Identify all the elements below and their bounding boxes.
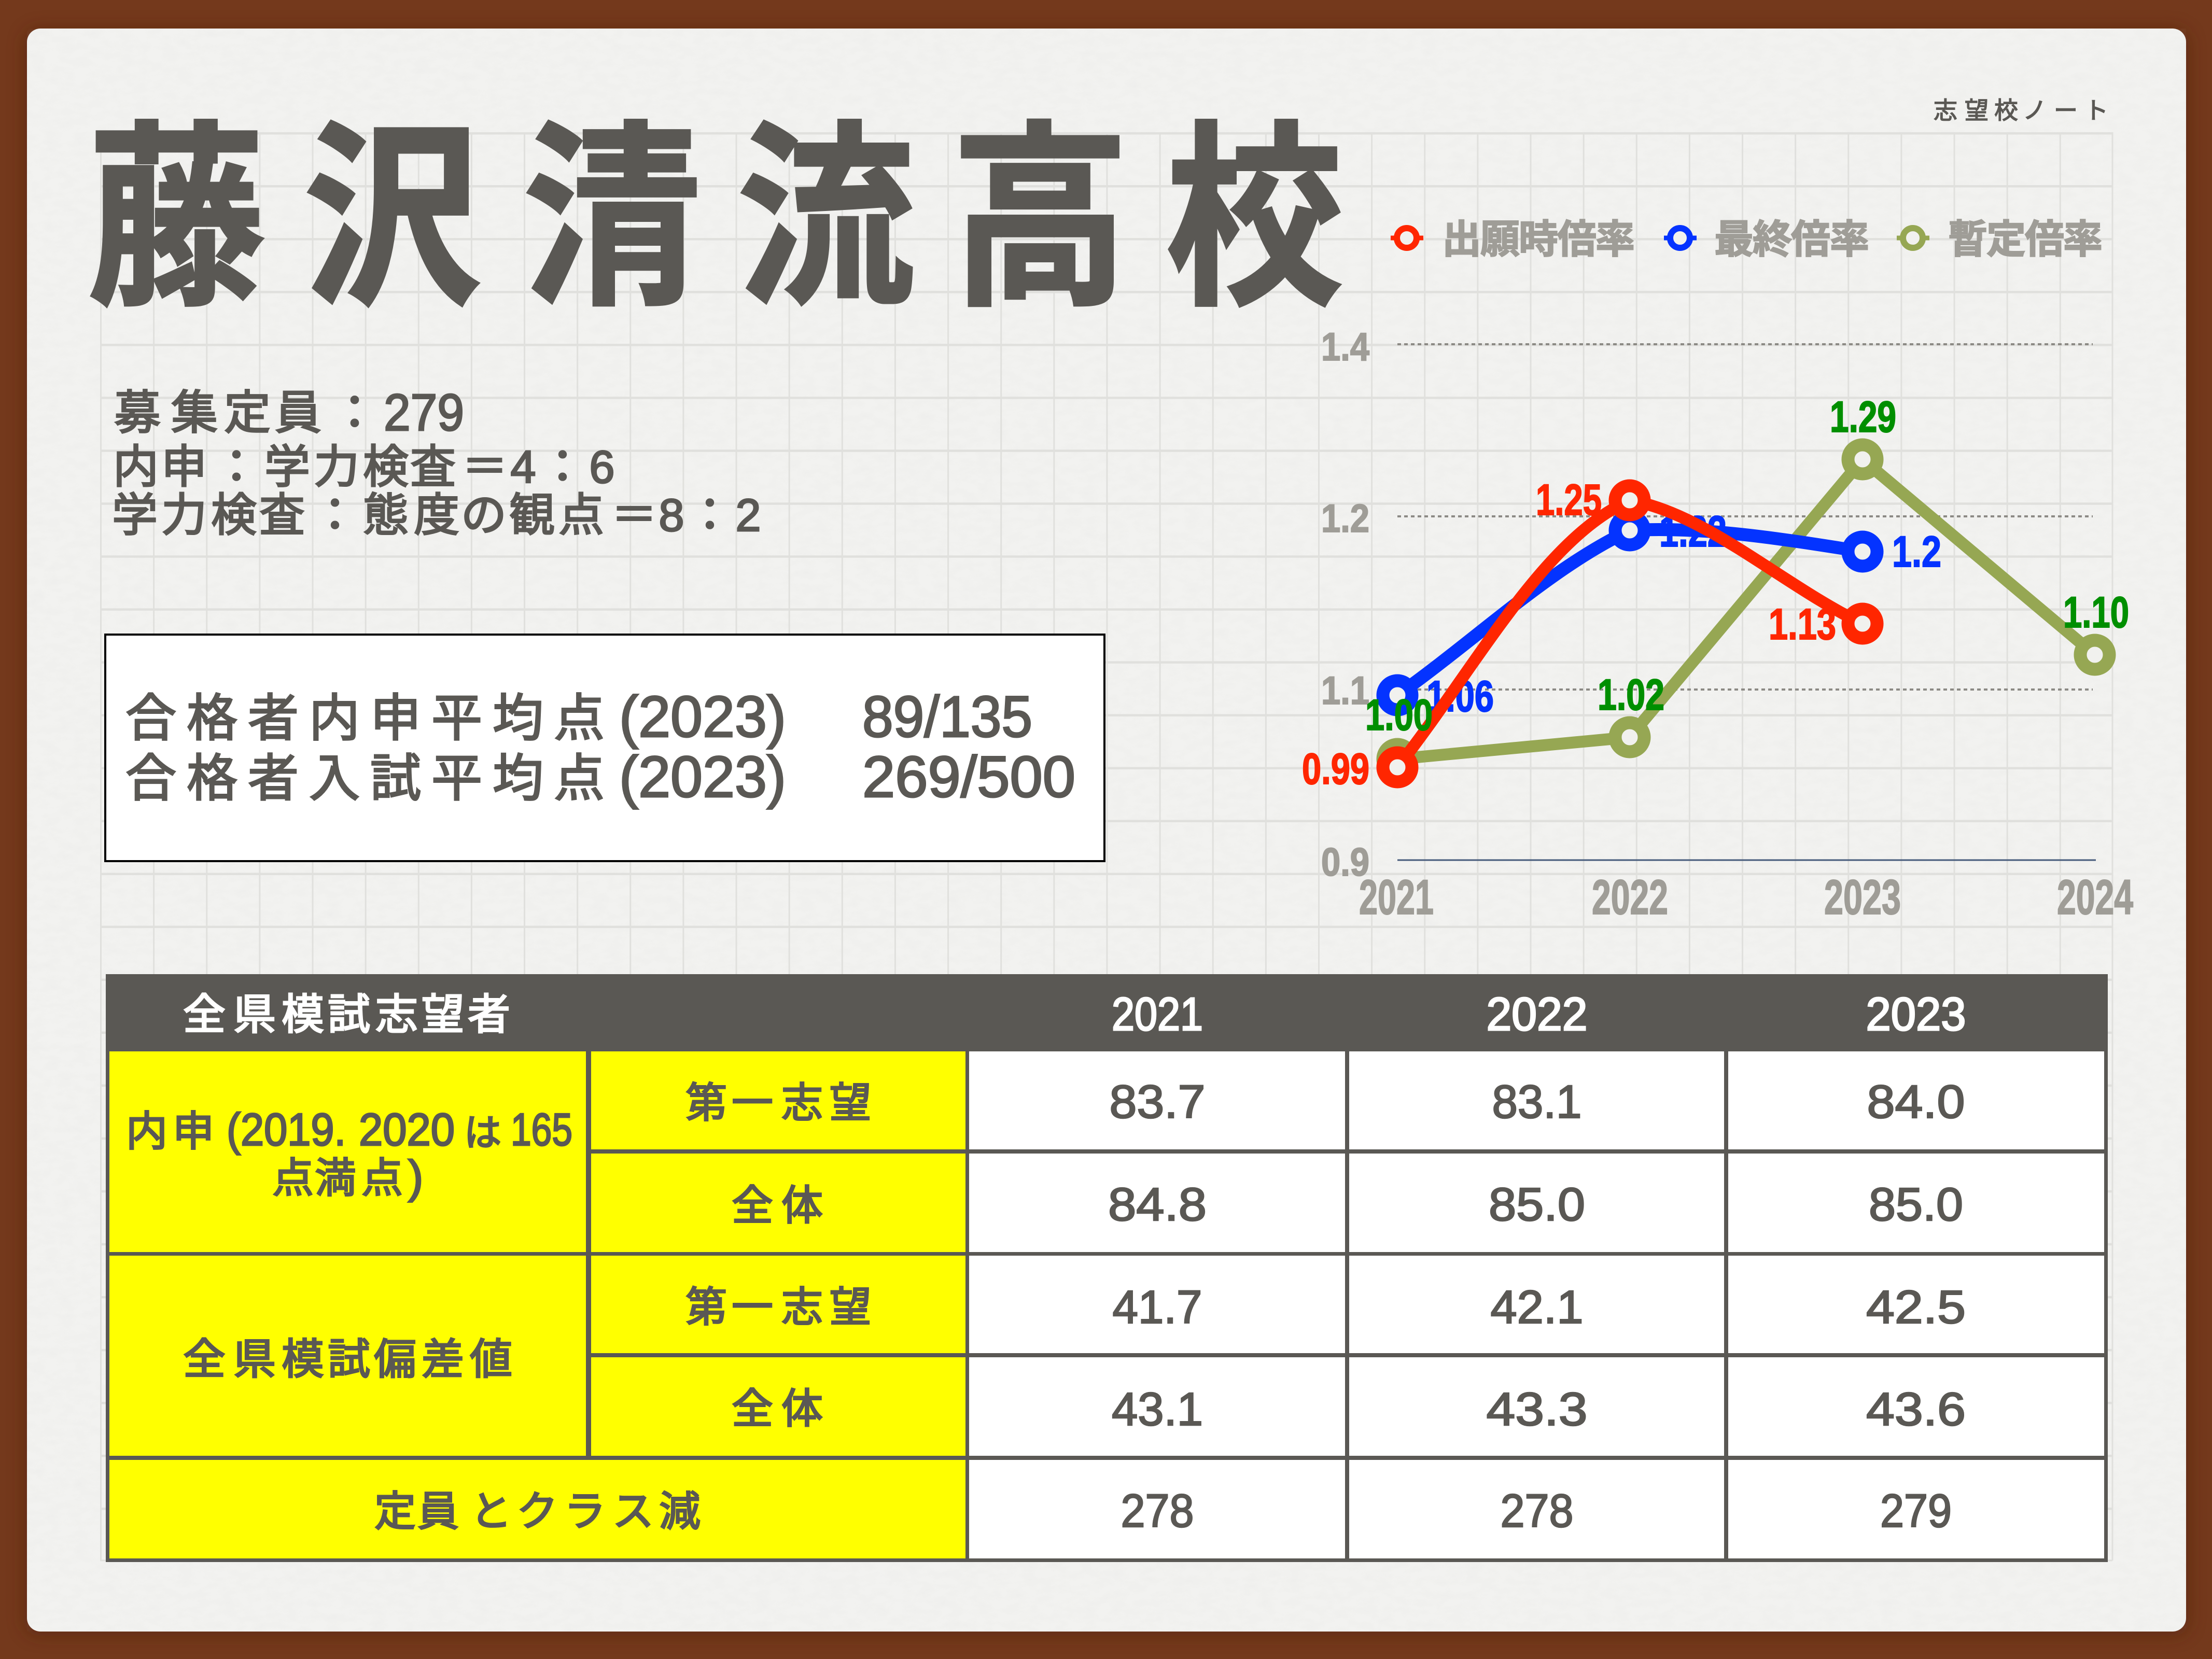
data labels: 暫定倍率: 1.02 bbox=[1598, 670, 1664, 719]
data row: 内申 全体 bbox=[969, 1154, 2104, 1252]
facts line 2: 内申：学力検査＝4：6 bbox=[113, 441, 614, 493]
data row: 偏差値 全体: 43.6 bbox=[1866, 1384, 1966, 1436]
x axis labels: 2023 bbox=[1824, 870, 1901, 925]
facts line 1: 279 bbox=[384, 384, 464, 442]
data labels: 暫定倍率 bbox=[1365, 392, 2129, 739]
data row: 定員: 278 bbox=[1501, 1485, 1573, 1537]
data labels: 出願時倍率 bbox=[1302, 475, 1836, 793]
y axis labels bbox=[1321, 325, 1369, 884]
y axis labels: 0.9 bbox=[1321, 840, 1369, 884]
data row: 定員: 279 bbox=[1880, 1485, 1952, 1537]
sub label: 偏差値 全体: 全体 bbox=[732, 1386, 823, 1432]
data row: 内申 全体: 85.0 bbox=[1489, 1179, 1585, 1231]
sub label: 内申 全体 bbox=[591, 1154, 965, 1252]
row group: 内申 bbox=[109, 1051, 586, 1252]
header row labels: 2021 bbox=[1112, 989, 1203, 1041]
data row: 偏差値 第一志望: 42.5 bbox=[1866, 1282, 1966, 1333]
data labels: 出願時倍率: 0.99 bbox=[1302, 744, 1369, 793]
facts line 3: 学力検査：態度の観点＝8：2 bbox=[112, 489, 761, 541]
notebook grid bbox=[100, 132, 2112, 1560]
data row: 内申 第一志望: 83.1 bbox=[1492, 1076, 1581, 1128]
row group: 内申: 165 bbox=[511, 1104, 572, 1155]
y axis labels: 1.2 bbox=[1321, 497, 1369, 541]
legend: 暫定倍率: 暫定倍率 bbox=[1948, 218, 2103, 262]
data labels: 最終倍率 bbox=[1426, 507, 1941, 721]
score line 1: 合格者内申平均点 bbox=[125, 690, 605, 747]
chart legend bbox=[1391, 218, 2103, 262]
score line 1: 89/135 bbox=[862, 684, 1032, 749]
header row labels: 2022 bbox=[1486, 989, 1588, 1041]
y axis labels: 1.1 bbox=[1321, 669, 1369, 713]
data labels: 出願時倍率: 1.13 bbox=[1769, 600, 1836, 649]
panel: applicants data table bbox=[106, 974, 2108, 1562]
sub label: 内申 第一志望: 第一志望 bbox=[685, 1080, 871, 1126]
school facts text block bbox=[112, 384, 761, 541]
score line 1 bbox=[125, 684, 1032, 749]
legend: 出願時倍率: 出願時倍率 bbox=[1442, 218, 1635, 262]
row group: 全県模試偏差値 bbox=[109, 1256, 586, 1456]
data row: 偏差値 第一志望 bbox=[969, 1256, 2104, 1353]
data row: 偏差値 全体 bbox=[969, 1357, 2104, 1456]
panel: average scores box bbox=[105, 635, 1104, 861]
y axis labels: 1.4 bbox=[1321, 325, 1369, 369]
data labels: 最終倍率: 1.22 bbox=[1659, 507, 1727, 556]
row group: 内申: 内申 bbox=[126, 1108, 214, 1155]
data row: 内申 第一志望: 83.7 bbox=[1110, 1076, 1205, 1128]
data row: 偏差値 第一志望: 42.1 bbox=[1490, 1282, 1584, 1333]
row label: 定員とクラス減: 定員とクラス減 bbox=[374, 1488, 701, 1535]
data row: 定員 bbox=[969, 1460, 2104, 1558]
data row: 内申 全体: 84.8 bbox=[1108, 1179, 1207, 1231]
header row labels: 2023 bbox=[1866, 989, 1966, 1041]
data row: 偏差値 全体: 43.3 bbox=[1486, 1384, 1588, 1436]
data labels: 暫定倍率: 1.29 bbox=[1830, 392, 1896, 441]
header row labels: 全県模試志望者 bbox=[183, 991, 510, 1038]
header row labels bbox=[183, 989, 1966, 1041]
y axis gridlines bbox=[1397, 344, 2096, 860]
score line 2: 合格者入試平均点 bbox=[125, 750, 605, 807]
table frame and header band bbox=[106, 974, 2108, 1562]
data labels: 暫定倍率: 1.10 bbox=[2063, 588, 2129, 637]
score line 2: (2023) bbox=[619, 744, 786, 809]
row group: 全県模試偏差値: 全県模試偏差値 bbox=[183, 1336, 512, 1383]
x axis labels: 2022 bbox=[1592, 870, 1668, 925]
score line 1: (2023) bbox=[619, 684, 786, 749]
title: 藤沢清流高校 bbox=[88, 109, 1343, 330]
x axis labels: 2024 bbox=[2057, 870, 2133, 925]
data labels: 最終倍率: 1.2 bbox=[1892, 527, 1941, 576]
series: 出願時倍率 bbox=[1383, 486, 1877, 782]
row group: 内申: (2019. bbox=[227, 1104, 346, 1155]
series: 暫定倍率 bbox=[1383, 445, 2109, 774]
sub label: 内申 第一志望 bbox=[591, 1051, 965, 1149]
x axis labels: 2021 bbox=[1359, 870, 1434, 925]
row group: 内申: ) bbox=[408, 1151, 423, 1202]
x axis labels bbox=[1359, 870, 2133, 925]
score line 2: 269/500 bbox=[862, 744, 1075, 809]
data row: 偏差値 全体: 43.1 bbox=[1112, 1384, 1203, 1436]
sub label: 偏差値 第一志望 bbox=[591, 1256, 965, 1353]
series: 最終倍率 bbox=[1383, 516, 1877, 710]
facts line 1 bbox=[114, 384, 464, 442]
data row: 内申 全体: 85.0 bbox=[1869, 1179, 1963, 1231]
data row: 内申 第一志望 bbox=[969, 1051, 2104, 1149]
data labels: 出願時倍率: 1.25 bbox=[1536, 475, 1602, 524]
facts line 1: 募集定員： bbox=[114, 387, 378, 439]
row group: 内申: 点満点 bbox=[272, 1155, 403, 1201]
data labels: 最終倍率: 1.06 bbox=[1426, 672, 1494, 721]
data row: 定員: 278 bbox=[1121, 1485, 1194, 1537]
sub label: 内申 全体: 全体 bbox=[732, 1183, 823, 1229]
sub label: 偏差値 全体 bbox=[591, 1357, 965, 1456]
data row: 偏差値 第一志望: 41.7 bbox=[1113, 1282, 1202, 1333]
data labels: 暫定倍率: 1.00 bbox=[1365, 691, 1433, 739]
line chart bbox=[1302, 325, 2133, 925]
data row: 内申 第一志望: 84.0 bbox=[1867, 1076, 1965, 1128]
brand label: 志望校ノート bbox=[1934, 97, 2108, 124]
sub label: 偏差値 第一志望: 第一志望 bbox=[685, 1284, 871, 1330]
row group: 内申: は bbox=[464, 1113, 501, 1154]
score line 2 bbox=[125, 744, 1075, 809]
row group: 内申: 2020 bbox=[359, 1104, 455, 1155]
row label: 定員とクラス減 bbox=[109, 1460, 965, 1558]
legend: 最終倍率: 最終倍率 bbox=[1714, 218, 1869, 262]
